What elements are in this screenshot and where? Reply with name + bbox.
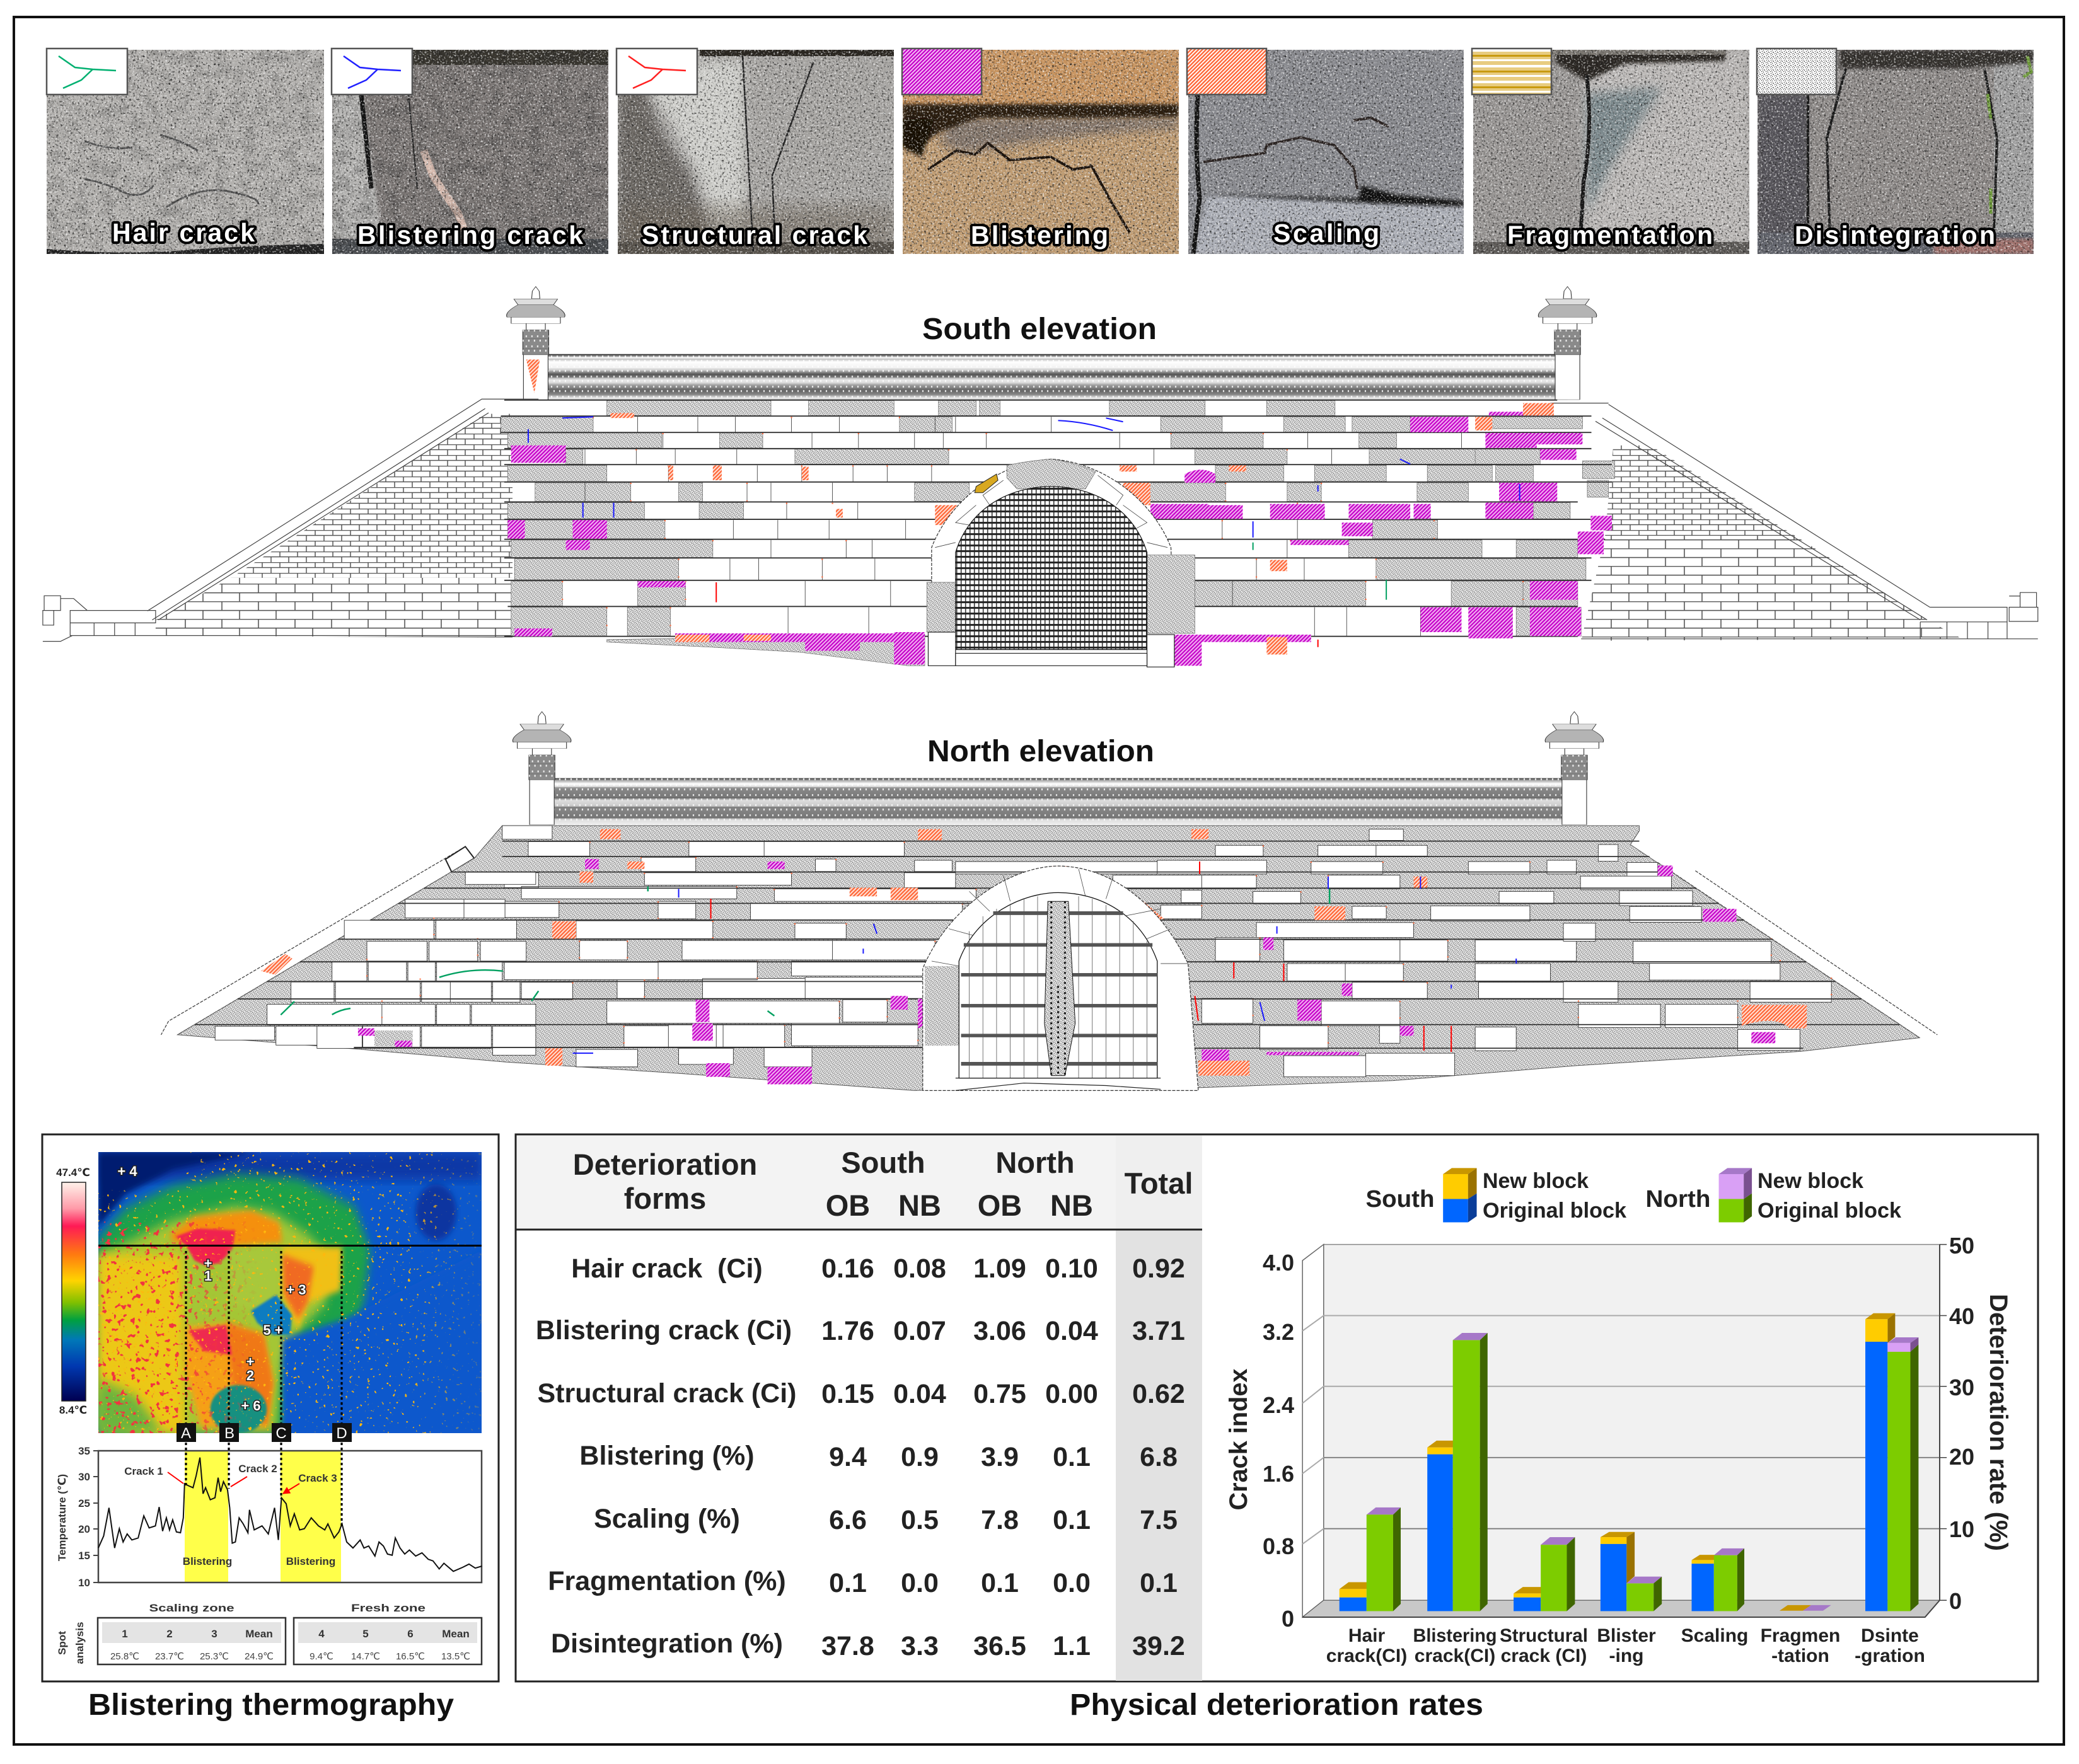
- spot markers: [117, 1163, 306, 1414]
- left axis labels: 2.4: [1263, 1392, 1294, 1418]
- temperature profile chart: Temperature (℃): [56, 1474, 68, 1561]
- panel: blistering thermography: [42, 1134, 499, 1681]
- panel: Structural crack photo: Structural crack: [642, 221, 867, 250]
- towers: [507, 287, 1597, 400]
- spot markers: + 3: [286, 1282, 306, 1298]
- table: 0.92: [1132, 1254, 1185, 1284]
- spot analysis tables: Mean: [442, 1628, 470, 1640]
- roof band: [538, 354, 1568, 400]
- chart legend: Original block: [1758, 1199, 1901, 1223]
- table: OB: [978, 1189, 1022, 1222]
- panel: Scaling photo: Scaling: [1273, 219, 1379, 248]
- right axis labels: 10: [1949, 1516, 1974, 1542]
- table: South: [841, 1146, 925, 1179]
- temperature profile chart: Blistering: [286, 1555, 335, 1567]
- iron gate: [956, 487, 1147, 650]
- left axis labels: 4.0: [1263, 1250, 1294, 1276]
- left axis labels: 1.6: [1263, 1461, 1294, 1487]
- chart legend: South: [1365, 1186, 1435, 1213]
- 3D bar chart: [1302, 1245, 1947, 1617]
- spot analysis tables: 5: [362, 1628, 369, 1640]
- joints: [585, 417, 1461, 636]
- spot analysis tables: 24.9℃: [245, 1651, 274, 1662]
- table: NB: [1050, 1189, 1093, 1222]
- table: OB: [826, 1189, 870, 1222]
- table: 7.8: [981, 1505, 1019, 1535]
- category labels: -tation: [1771, 1646, 1829, 1666]
- blistering patches: [507, 412, 1612, 666]
- table: 0.15: [821, 1379, 874, 1409]
- spot analysis tables: analysis: [74, 1622, 86, 1664]
- course lines: [501, 400, 1612, 637]
- spot analysis tables: Spot: [56, 1631, 68, 1655]
- category labels: [1326, 1625, 1925, 1666]
- panel: Scaling photo: [1188, 50, 1464, 254]
- drawing: south elevation: [43, 287, 2038, 667]
- temperature profile chart: 30: [78, 1471, 90, 1483]
- table: 3.06: [973, 1316, 1026, 1346]
- panel: Blistering photo: Blistering: [971, 221, 1108, 250]
- scaling patches: [261, 829, 1807, 1076]
- colour scale: 47.4℃: [56, 1167, 90, 1179]
- table: Blistering (%): [579, 1441, 755, 1471]
- spot markers: + 6: [241, 1398, 261, 1414]
- category labels: Blistering: [1413, 1625, 1497, 1646]
- temperature profile chart: Blistering: [183, 1555, 232, 1567]
- right axis labels: 50: [1949, 1233, 1974, 1259]
- table: 0.75: [973, 1379, 1026, 1409]
- gate centre post: [1045, 901, 1075, 1076]
- arch: [932, 459, 1174, 632]
- disintegration field: [178, 826, 1920, 1090]
- table: 37.8: [821, 1631, 874, 1661]
- spot markers: 1: [204, 1268, 212, 1284]
- scaling patches: [610, 403, 1554, 655]
- spot markers: 2: [246, 1368, 254, 1383]
- scaling dots on block edges: [367, 841, 1831, 1049]
- table: 0.0: [901, 1568, 939, 1598]
- bars: hair crack: [1340, 1507, 1401, 1611]
- table: 0.62: [1132, 1379, 1185, 1409]
- table: 7.5: [1140, 1505, 1178, 1535]
- table: 0.08: [893, 1254, 946, 1284]
- slope brickwork right: [1550, 403, 2038, 641]
- spot analysis tables: 25.3℃: [200, 1651, 229, 1662]
- slope coping: [161, 846, 1937, 1038]
- temperature profile chart: 10: [78, 1577, 90, 1589]
- bars: blistering crack: [1427, 1333, 1488, 1611]
- blue and red cracks: [528, 417, 1520, 538]
- spot analysis tables: 14.7℃: [351, 1651, 380, 1662]
- axis title: deterioration rate: Deterioration rate (%): [1984, 1294, 2012, 1551]
- right axis labels: 40: [1949, 1303, 1974, 1329]
- table: 1.09: [973, 1254, 1026, 1284]
- table: 0.1: [829, 1568, 867, 1598]
- scaling dots on joints: [562, 417, 1523, 636]
- table: 0.1: [1140, 1568, 1178, 1598]
- section letters: A: [181, 1425, 191, 1442]
- category labels: crack (CI): [1501, 1646, 1587, 1666]
- intact white blocks centre: [504, 829, 1577, 1077]
- bars: fragmentation: [1780, 1605, 1831, 1611]
- table: North: [995, 1146, 1075, 1179]
- spot analysis tables: 9.4℃: [310, 1651, 333, 1662]
- spot analysis tables: 16.5℃: [396, 1651, 425, 1662]
- arch joints: [932, 869, 1188, 966]
- heading: Blistering thermography: Blistering thermography: [88, 1688, 454, 1722]
- table: 9.4: [829, 1442, 867, 1472]
- table: 0.00: [1045, 1379, 1098, 1409]
- piers: [927, 555, 1195, 633]
- table: 3.3: [901, 1631, 939, 1661]
- spot markers: +: [246, 1354, 254, 1369]
- table: 0.1: [1053, 1505, 1091, 1535]
- temperature profile chart: [56, 1445, 482, 1589]
- right axis labels: 0: [1949, 1588, 1962, 1614]
- bars: scaling: [1692, 1548, 1744, 1611]
- crack lines: [711, 862, 1451, 1052]
- heading: Physical deterioration rates: Physical deterioration rates: [1070, 1688, 1483, 1722]
- arch keystone: [1007, 459, 1096, 489]
- drawing: north elevation: [161, 712, 1937, 1090]
- gate rails: [961, 911, 1157, 1066]
- spot analysis tables: Mean: [245, 1628, 273, 1640]
- left axis labels: [1263, 1250, 1294, 1632]
- spot analysis tables: 4: [318, 1628, 325, 1640]
- table: 36.5: [973, 1631, 1026, 1661]
- panel: Fragmentation photo: Fragmentation: [1507, 221, 1713, 250]
- intact white blocks sides: [215, 826, 1831, 1055]
- towers: [513, 712, 1604, 825]
- category labels: Structural: [1500, 1625, 1588, 1646]
- chart legend: North: [1645, 1186, 1711, 1213]
- spot analysis tables: 6: [407, 1628, 414, 1640]
- table: forms: [624, 1182, 706, 1215]
- table: NB: [898, 1189, 941, 1222]
- table: 0.0: [1053, 1568, 1091, 1598]
- spot analysis tables: 13.5℃: [441, 1651, 470, 1662]
- heading: South elevation: South elevation: [922, 313, 1157, 346]
- coping block: [446, 846, 474, 872]
- temperature profile chart: 15: [78, 1550, 90, 1562]
- arch pier stones: [874, 966, 959, 1085]
- iron gate: [959, 892, 1157, 1078]
- chart legend: Original block: [1483, 1199, 1626, 1223]
- table: 0.07: [893, 1316, 946, 1346]
- table: Disintegration (%): [551, 1629, 783, 1659]
- spot analysis tables: Fresh zone: [351, 1602, 426, 1614]
- bars: blistering: [1601, 1532, 1662, 1611]
- panel: Disintegration photo: [1758, 50, 2034, 254]
- gate base: [928, 632, 1174, 667]
- temperature profile chart: Crack 1: [124, 1465, 163, 1477]
- legend swatch: blistering crack: [332, 49, 412, 95]
- table: 0.16: [821, 1254, 874, 1284]
- spot analysis tables: Scaling zone: [149, 1602, 235, 1614]
- legend swatch: structural crack: [617, 49, 697, 95]
- panel: Blistering crack photo: Blistering crack: [357, 221, 583, 250]
- fragmentation mark: [975, 474, 998, 493]
- temperature profile chart: 20: [78, 1523, 90, 1535]
- profile line: [98, 1245, 482, 1247]
- legend swatch: fragmentation stripes: [1472, 49, 1551, 95]
- table: Scaling (%): [594, 1504, 740, 1534]
- table: Structural crack (Ci): [537, 1378, 797, 1409]
- left axis labels: 3.2: [1263, 1319, 1294, 1345]
- course lines: [195, 841, 1900, 1048]
- section letters: B: [224, 1425, 235, 1442]
- panel: Fragmentation photo: [1473, 50, 1749, 254]
- legend swatch: hair crack: [47, 49, 127, 95]
- panel: Blistering crack photo: [332, 50, 608, 254]
- table: Deterioration: [573, 1148, 757, 1181]
- table: 0.10: [1045, 1254, 1098, 1284]
- legend swatch: blistering hatch: [902, 49, 982, 95]
- spot analysis tables: [56, 1602, 482, 1664]
- chart legend: [1365, 1168, 1901, 1223]
- arch joints: [935, 475, 1167, 548]
- section letters: C: [275, 1425, 287, 1442]
- blistering patches: [358, 859, 1775, 1085]
- table: 39.2: [1132, 1631, 1185, 1661]
- table: 0.04: [893, 1379, 946, 1409]
- temperature profile chart: Crack 2: [238, 1463, 277, 1475]
- category labels: -ing: [1609, 1646, 1643, 1666]
- spot markers: +: [204, 1255, 212, 1271]
- bars: disintegration: [1865, 1313, 1918, 1611]
- panel: Structural crack photo: [618, 50, 894, 254]
- axis title: crack index: Crack index: [1225, 1369, 1253, 1510]
- table: 1.76: [821, 1316, 874, 1346]
- panel: Hair crack photo: [47, 50, 324, 254]
- legend swatch: disintegration speckle: [1757, 49, 1836, 95]
- category labels: crack(CI): [1326, 1646, 1407, 1666]
- table: Fragmentation (%): [548, 1566, 786, 1596]
- bars: structural crack: [1514, 1537, 1575, 1611]
- spot analysis tables: 25.8℃: [110, 1651, 139, 1662]
- roof band: [548, 778, 1574, 826]
- category labels: Hair: [1348, 1625, 1386, 1646]
- colour scale: 8.4℃: [59, 1404, 87, 1416]
- spot markers: + 4: [117, 1163, 137, 1179]
- spot analysis tables: 3: [211, 1628, 217, 1640]
- colour scale: [56, 1167, 90, 1416]
- panel: Disintegration photo: Disintegration: [1795, 221, 1995, 250]
- right axis labels: 30: [1949, 1375, 1974, 1400]
- disintegration blocks: [501, 401, 1614, 666]
- table: 1.1: [1053, 1631, 1091, 1661]
- category labels: Fragmen: [1761, 1625, 1840, 1646]
- category labels: crack(CI): [1415, 1646, 1495, 1666]
- temperature profile chart: 35: [78, 1445, 90, 1457]
- arch: [923, 866, 1198, 1090]
- table: Total: [1125, 1167, 1193, 1200]
- gate bars: [970, 896, 1147, 1078]
- slope brickwork left: [43, 399, 538, 642]
- section letters: [181, 1425, 347, 1442]
- table: Blistering crack (Ci): [536, 1315, 792, 1346]
- spot analysis tables: 2: [166, 1628, 173, 1640]
- right axis labels: 20: [1949, 1444, 1974, 1470]
- panel: Blistering photo: [903, 50, 1179, 254]
- panel: Hair crack photo: Hair crack: [112, 218, 255, 247]
- table: [516, 1136, 1202, 1681]
- left axis labels: 0: [1282, 1606, 1294, 1632]
- table: 6.6: [829, 1505, 867, 1535]
- category labels: -gration: [1855, 1646, 1925, 1666]
- section markers: [177, 1423, 352, 1442]
- category labels: Scaling: [1681, 1625, 1748, 1646]
- table: 3.71: [1132, 1316, 1185, 1346]
- section dashed lines: [186, 1251, 342, 1527]
- spot analysis tables: 1: [122, 1628, 128, 1640]
- table: 0.1: [1053, 1442, 1091, 1472]
- heading: North elevation: North elevation: [927, 735, 1154, 768]
- legend swatch: scaling hatch: [1187, 49, 1266, 95]
- table: 0.9: [901, 1442, 939, 1472]
- gray island: [374, 1030, 413, 1046]
- table: 0.1: [981, 1568, 1019, 1598]
- right axis labels: [1949, 1233, 1974, 1614]
- table: 0.04: [1045, 1316, 1098, 1346]
- panel: physical deterioration rates: [516, 1134, 2038, 1681]
- table: 0.5: [901, 1505, 939, 1535]
- spot markers: 5 +: [263, 1322, 283, 1338]
- chart legend: New block: [1758, 1169, 1863, 1193]
- category labels: Blister: [1597, 1625, 1656, 1646]
- temperature profile chart: Crack 3: [298, 1472, 337, 1484]
- category labels: Dsinte: [1861, 1625, 1919, 1646]
- table: 3.9: [981, 1442, 1019, 1472]
- table: Hair crack (Ci): [571, 1254, 763, 1284]
- spot analysis tables: 23.7℃: [155, 1651, 184, 1662]
- chart legend: New block: [1483, 1169, 1589, 1193]
- gate foot: [956, 1078, 1161, 1090]
- table: 6.8: [1140, 1442, 1178, 1472]
- left axis labels: 0.8: [1263, 1533, 1294, 1559]
- temperature profile chart: 25: [78, 1497, 90, 1509]
- section letters: D: [336, 1425, 347, 1442]
- thermal image: [98, 1152, 482, 1433]
